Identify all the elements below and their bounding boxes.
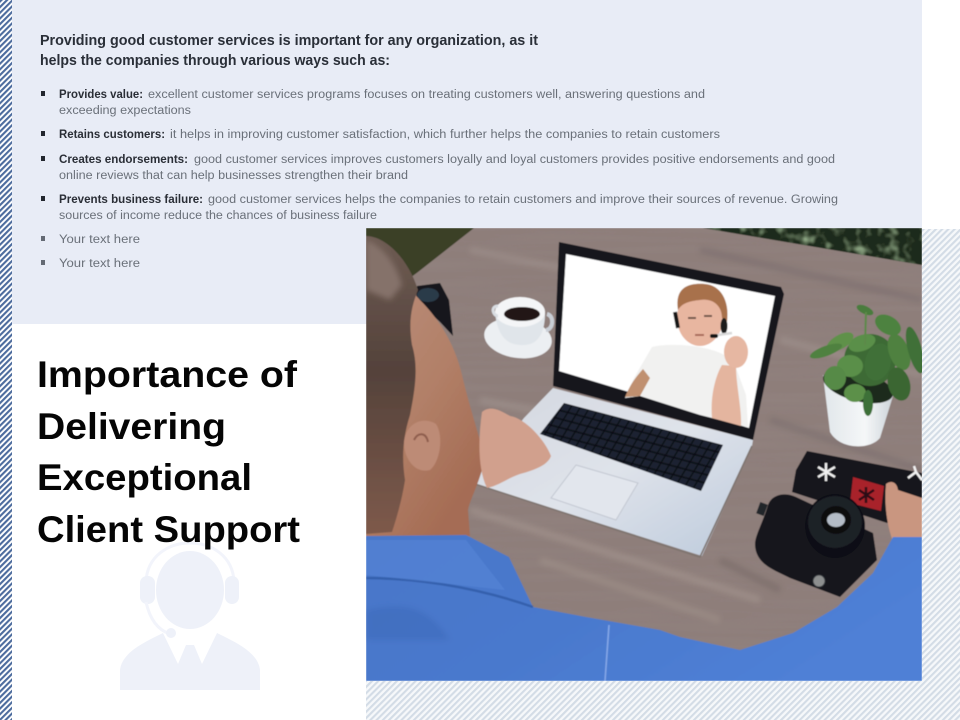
bullet: retains customers: Retains customers: xyxy=(59,129,165,141)
bullet: retains customers: it helps in improving customer satisfaction, which further helps the companies to retain customers xyxy=(170,129,720,141)
intro heading: helps the companies through various ways such as: xyxy=(40,52,390,69)
photo: man on a video call with a support agent xyxy=(366,228,928,681)
title: Exceptional xyxy=(37,457,252,498)
bullet: provides value: Provides value: xyxy=(59,89,143,101)
laptop screen xyxy=(553,242,784,440)
table surface xyxy=(412,228,922,650)
keyboard xyxy=(540,403,723,491)
foliage behind table xyxy=(366,228,922,276)
panel: text background xyxy=(12,0,922,324)
potted plant xyxy=(808,303,928,446)
bullet: creates endorsements: Creates endorsements: xyxy=(59,154,188,166)
right hatched strip xyxy=(922,229,960,720)
bullet: creates endorsements xyxy=(41,154,835,182)
bullet: prevents business failure: good customer services helps the companies to retain customers and improve their sources of revenue. Growing xyxy=(208,194,838,206)
intro heading xyxy=(40,32,538,69)
hair xyxy=(366,236,418,534)
bullet: prevents business failure: sources of income reduce the chances of business failure xyxy=(59,210,377,222)
bullet list xyxy=(41,89,838,270)
man's right hand xyxy=(885,482,922,542)
ear xyxy=(404,421,440,471)
laptop base xyxy=(472,388,753,557)
bullet: provides value xyxy=(41,89,705,117)
black lens cap xyxy=(416,283,453,336)
black notebook with star marks xyxy=(792,451,922,523)
left hatched strip xyxy=(0,0,12,720)
title: Importance of xyxy=(37,354,298,395)
trackpad xyxy=(551,465,638,520)
bullet: creates endorsements: good customer services improves customers loyally and loyal customers provides positive endorsements and good xyxy=(194,154,835,166)
coffee cup and saucer xyxy=(482,297,554,363)
man's hand on chin xyxy=(479,409,551,488)
bullet: creates endorsements: online reviews that can help businesses strengthen their brand xyxy=(59,170,408,182)
title: Delivering xyxy=(37,406,226,447)
title: Client Support xyxy=(37,509,300,550)
bullet: prevents business failure: Prevents business failure: xyxy=(59,194,203,206)
title xyxy=(37,354,300,550)
icon: support agent with headset xyxy=(120,543,260,690)
bullet: placeholder two: Your text here xyxy=(59,258,140,270)
bullet: provides value: exceeding expectations xyxy=(59,105,191,117)
agent on the screen xyxy=(625,284,748,427)
intro heading: Providing good customer services is important for any organization, as it xyxy=(40,32,538,49)
man's blue shirt xyxy=(366,535,922,681)
camera xyxy=(755,494,877,597)
bullet: prevents business failure xyxy=(41,194,838,222)
bullet: provides value: excellent customer services programs focuses on treating customers well, answering questions and xyxy=(148,89,705,101)
bottom hatched strip xyxy=(366,681,960,720)
bullet: placeholder one: Your text here xyxy=(59,234,140,246)
man's head xyxy=(366,236,484,536)
